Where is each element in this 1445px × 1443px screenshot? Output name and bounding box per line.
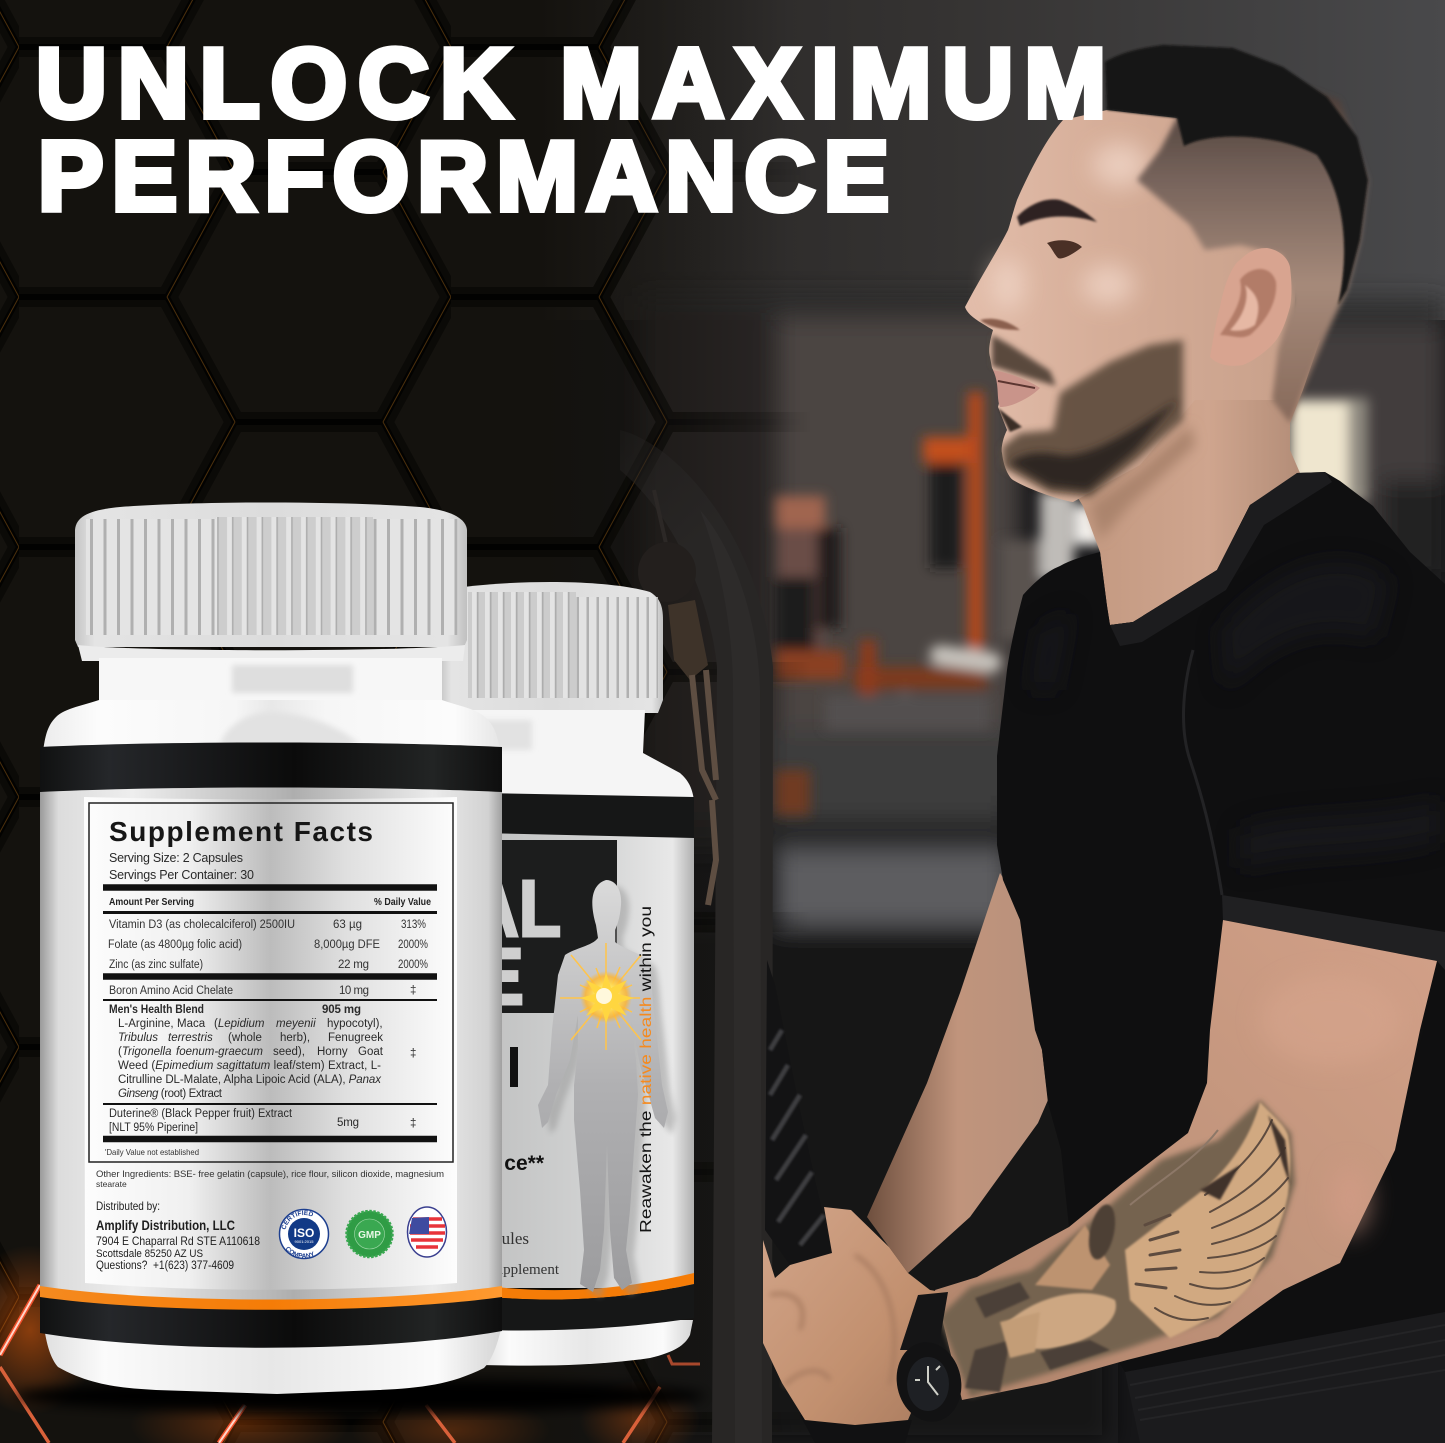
nutrient rows: 8,000µg DFE bbox=[314, 939, 380, 951]
nutrient rows: Zinc (as zinc sulfate) bbox=[109, 959, 203, 971]
men's health blend: ( bbox=[118, 1046, 122, 1058]
man: black shirt bbox=[997, 472, 1445, 1372]
table header: % Daily Value bbox=[374, 897, 431, 908]
inner ear bbox=[1220, 269, 1276, 337]
duterine row bbox=[109, 1108, 416, 1134]
arm shading bbox=[1260, 975, 1400, 1235]
men's health blend: Citrulline DL-Malate, Alpha Lipoic Acid (ALA), Panax bbox=[118, 1074, 382, 1086]
rope under the fist bbox=[800, 1415, 912, 1443]
men's health blend: Weed (Epimedium sagittatum leaf/stem) Extract, L- bbox=[118, 1060, 381, 1072]
horse head bbox=[1084, 1202, 1120, 1262]
distributor details: Distributed by: bbox=[96, 1199, 160, 1213]
men's health blend: meyenii bbox=[276, 1018, 316, 1030]
men's health blend: (whole bbox=[228, 1032, 262, 1044]
back bottle black label block bbox=[490, 840, 617, 1013]
tattoo: winged horse bbox=[939, 1100, 1295, 1397]
eye bbox=[1047, 240, 1082, 258]
front bottle lower band bbox=[40, 1297, 502, 1348]
icon: wristwatch bbox=[889, 1292, 969, 1428]
honeycomb pattern bbox=[0, 0, 797, 1443]
wing light area bbox=[1125, 1102, 1290, 1338]
wing dark accents bbox=[1200, 1115, 1290, 1200]
hair fade on side of head bbox=[1137, 60, 1368, 423]
skin highlights bbox=[992, 143, 1148, 311]
wing arc line bbox=[1130, 1130, 1218, 1205]
front bottle cap rim bbox=[78, 645, 465, 661]
mouth line bbox=[998, 381, 1035, 388]
man: shorts bbox=[1125, 1312, 1445, 1443]
back bottle product name: AL bbox=[469, 864, 561, 953]
nutrient rows: Boron Amino Acid Chelate bbox=[109, 985, 233, 997]
man: main arm bbox=[935, 920, 1437, 1400]
men's health blend: Trigonella bbox=[122, 1046, 172, 1058]
dark patches bbox=[965, 1282, 1110, 1392]
back bottle lower band bbox=[480, 1284, 694, 1330]
back bottle label bbox=[480, 833, 694, 1288]
brow bbox=[1017, 199, 1097, 226]
back bottle cap bbox=[440, 582, 663, 713]
supplement facts heading: Supplement Facts bbox=[109, 816, 373, 847]
men's health blend: herb), bbox=[280, 1032, 310, 1044]
panel: dark left side fade bbox=[0, 0, 790, 1443]
back bottle top band bbox=[480, 793, 694, 838]
label white panel bbox=[84, 797, 457, 1290]
title line 2: PERFORMANCE bbox=[38, 121, 889, 231]
thin rules bbox=[103, 911, 437, 914]
men's health blend: Fenugreek bbox=[328, 1032, 383, 1044]
back bottle product name: E bbox=[471, 932, 524, 1021]
body silhouette bbox=[538, 880, 668, 1292]
back bottle product name bbox=[469, 864, 561, 1021]
horse neck bbox=[1035, 1225, 1110, 1290]
man: fist bbox=[763, 1207, 947, 1425]
other ingredients: stearate bbox=[96, 1179, 127, 1189]
serving information bbox=[109, 851, 254, 882]
front bottle silver body bbox=[40, 785, 502, 1300]
tattoo shaded base bbox=[939, 1100, 1295, 1397]
shorts elastic folds bbox=[1130, 1325, 1445, 1420]
hair crown bbox=[1105, 45, 1368, 305]
men's health blend: terrestris bbox=[168, 1032, 213, 1044]
men's health blend: hypocotyl), bbox=[327, 1018, 383, 1030]
nutrient rows: ‡ bbox=[410, 985, 416, 997]
distributor details: 7904 E Chaparral Rd STE A110618 bbox=[96, 1234, 260, 1248]
nutrient rows bbox=[108, 919, 428, 997]
nutrient rows: 10 mg bbox=[339, 985, 369, 997]
duterine row: ‡ bbox=[410, 1118, 416, 1130]
cap ribs: centre bbox=[216, 517, 373, 635]
men's health blend: Ginseng (root) Extract bbox=[118, 1088, 223, 1100]
front bottle shoulder bbox=[43, 700, 500, 752]
title bbox=[36, 28, 1106, 231]
nutrient rows: Vitamin D3 (as cholecalciferol) 2500IU bbox=[109, 919, 295, 931]
back bottle orange stripe bbox=[480, 1273, 694, 1300]
icon: cable stop ball bbox=[638, 542, 696, 602]
distributor details: Questions? +1(623) 377-4609 bbox=[96, 1260, 234, 1272]
men's health blend: foenum-graecum bbox=[176, 1046, 263, 1058]
back bottle text fragments bbox=[495, 1047, 560, 1278]
distributor details: Amplify Distribution, LLC bbox=[96, 1218, 235, 1233]
icon: GMP badge: GMP bbox=[358, 1230, 381, 1241]
back bottle text fragments: ce** bbox=[504, 1152, 545, 1175]
nutrient rows: 313% bbox=[401, 919, 426, 931]
rope ring and hardware bbox=[620, 430, 773, 1443]
serving information: Serving Size: 2 Capsules bbox=[109, 851, 243, 865]
men's health blend: ‡ bbox=[410, 1048, 416, 1060]
neck collar band bbox=[1110, 472, 1332, 646]
ear bbox=[1210, 248, 1292, 366]
men's health blend: Horny bbox=[317, 1046, 348, 1058]
icon: ISO certified badge bbox=[278, 1208, 330, 1260]
distributor details: Scottsdale 85250 AZ US bbox=[96, 1248, 203, 1260]
other ingredients: Other Ingredients: BSE- free gelatin (capsule), rice flour, silicon dioxide, magnesium bbox=[96, 1169, 444, 1180]
face bbox=[965, 110, 1300, 502]
rope bbox=[765, 960, 832, 1265]
front bottle bottom base bbox=[40, 1325, 502, 1394]
under-jaw neck shadow bbox=[1090, 425, 1195, 540]
back bottle cap ribs: centre bbox=[468, 592, 576, 698]
soul patch bbox=[998, 408, 1022, 432]
icon: carabiner bbox=[692, 670, 716, 905]
daily value note: 'Daily Value not established bbox=[105, 1147, 199, 1157]
duterine row: 5mg bbox=[337, 1117, 359, 1129]
front bottle cap bbox=[75, 502, 467, 647]
men's health blend bbox=[109, 1004, 416, 1100]
heavy rules bbox=[103, 888, 437, 1139]
neck bbox=[1073, 340, 1320, 625]
orange stripe bbox=[40, 1286, 502, 1312]
men's health blend: Tribulus bbox=[118, 1032, 158, 1044]
table header bbox=[109, 897, 431, 908]
table header: Amount Per Serving bbox=[109, 897, 194, 908]
cap ribs: left bbox=[86, 519, 216, 635]
sleeve hem bbox=[1222, 895, 1445, 970]
back bottle text fragments: upplement bbox=[496, 1262, 560, 1278]
back bottle bbox=[440, 582, 694, 1366]
men's health blend: seed), bbox=[273, 1046, 305, 1058]
nutrient rows: 22 mg bbox=[338, 959, 369, 971]
distributor details bbox=[96, 1199, 260, 1272]
duterine row: [NLT 95% Piperine] bbox=[109, 1122, 198, 1134]
serving information: Servings Per Container: 30 bbox=[109, 868, 254, 882]
horse body bbox=[1005, 1293, 1116, 1349]
nutrient rows: 2000% bbox=[398, 939, 428, 951]
icon: ISO certified badge: ISO bbox=[294, 1226, 314, 1240]
icon: ISO certified badge: COMPANY bbox=[286, 1246, 314, 1258]
men's health blend: L-Arginine, bbox=[118, 1018, 174, 1030]
jawline beard shadow bbox=[1010, 400, 1178, 490]
back bottle neck shade bbox=[470, 720, 532, 750]
blend rules bbox=[103, 1000, 437, 1104]
back bottle base bbox=[480, 1320, 693, 1366]
icon: ISO certified badge: CERTIFIED bbox=[282, 1210, 314, 1230]
man: head and neck bbox=[965, 45, 1368, 625]
ear highlight bbox=[1230, 285, 1258, 331]
cable bbox=[654, 490, 667, 548]
back bottle cap ribs: side bbox=[576, 597, 658, 698]
beard bbox=[1002, 340, 1183, 497]
men's health blend: ( bbox=[214, 1018, 218, 1030]
knuckle shading bbox=[770, 1255, 895, 1385]
nutrient rows: Folate (as 4800µg folic acid) bbox=[108, 939, 242, 951]
icon: GMP badge bbox=[346, 1211, 392, 1257]
wing feather outlines bbox=[1136, 1120, 1288, 1320]
duterine row: Duterine® (Black Pepper fruit) Extract bbox=[109, 1108, 293, 1120]
other ingredients bbox=[96, 1169, 444, 1189]
moustache bbox=[992, 335, 1056, 386]
glowing hex lines at the bottom bbox=[0, 1245, 700, 1443]
man: far arm bbox=[867, 873, 1048, 1273]
icon: energy star burst bbox=[560, 943, 641, 1050]
title line 1: UNLOCK MAXIMUM bbox=[36, 28, 1106, 138]
front bottle neck bbox=[99, 658, 442, 708]
back bottle text fragments: sules bbox=[495, 1229, 529, 1248]
icon: USA flag badge bbox=[408, 1207, 446, 1257]
icon: cable clip bbox=[668, 600, 708, 680]
nostril bbox=[980, 319, 1020, 330]
men's health blend: Maca bbox=[177, 1018, 206, 1030]
lips bbox=[993, 370, 1040, 407]
shadow under bottles bbox=[15, 1379, 705, 1413]
shirt soft folds bbox=[1030, 562, 1440, 870]
back bottle neck and shoulder bbox=[440, 710, 694, 800]
armpit seam bbox=[1184, 650, 1222, 895]
horse leg bbox=[1000, 1312, 1040, 1358]
body silhouette shadow bbox=[546, 886, 676, 1298]
front bottle bbox=[40, 502, 502, 1394]
nutrient rows: 2000% bbox=[398, 959, 428, 971]
men's health blend: Goat bbox=[358, 1046, 384, 1058]
vertical tagline: Reawaken the native health within you bbox=[638, 906, 655, 1233]
men's health blend: Men's Health Blend bbox=[109, 1004, 204, 1016]
shoulder shade bbox=[220, 712, 360, 745]
cap ribs: right bbox=[373, 519, 458, 635]
front bottle neck shade bbox=[232, 665, 353, 693]
men's health blend: Lepidium bbox=[218, 1018, 265, 1030]
men's health blend: 905 mg bbox=[322, 1004, 361, 1016]
nutrient rows: 63 µg bbox=[333, 919, 362, 931]
supplement facts box bbox=[89, 803, 453, 1162]
icon: ISO certified badge: 9001:2015 bbox=[295, 1239, 314, 1244]
front bottle top band bbox=[40, 742, 502, 792]
